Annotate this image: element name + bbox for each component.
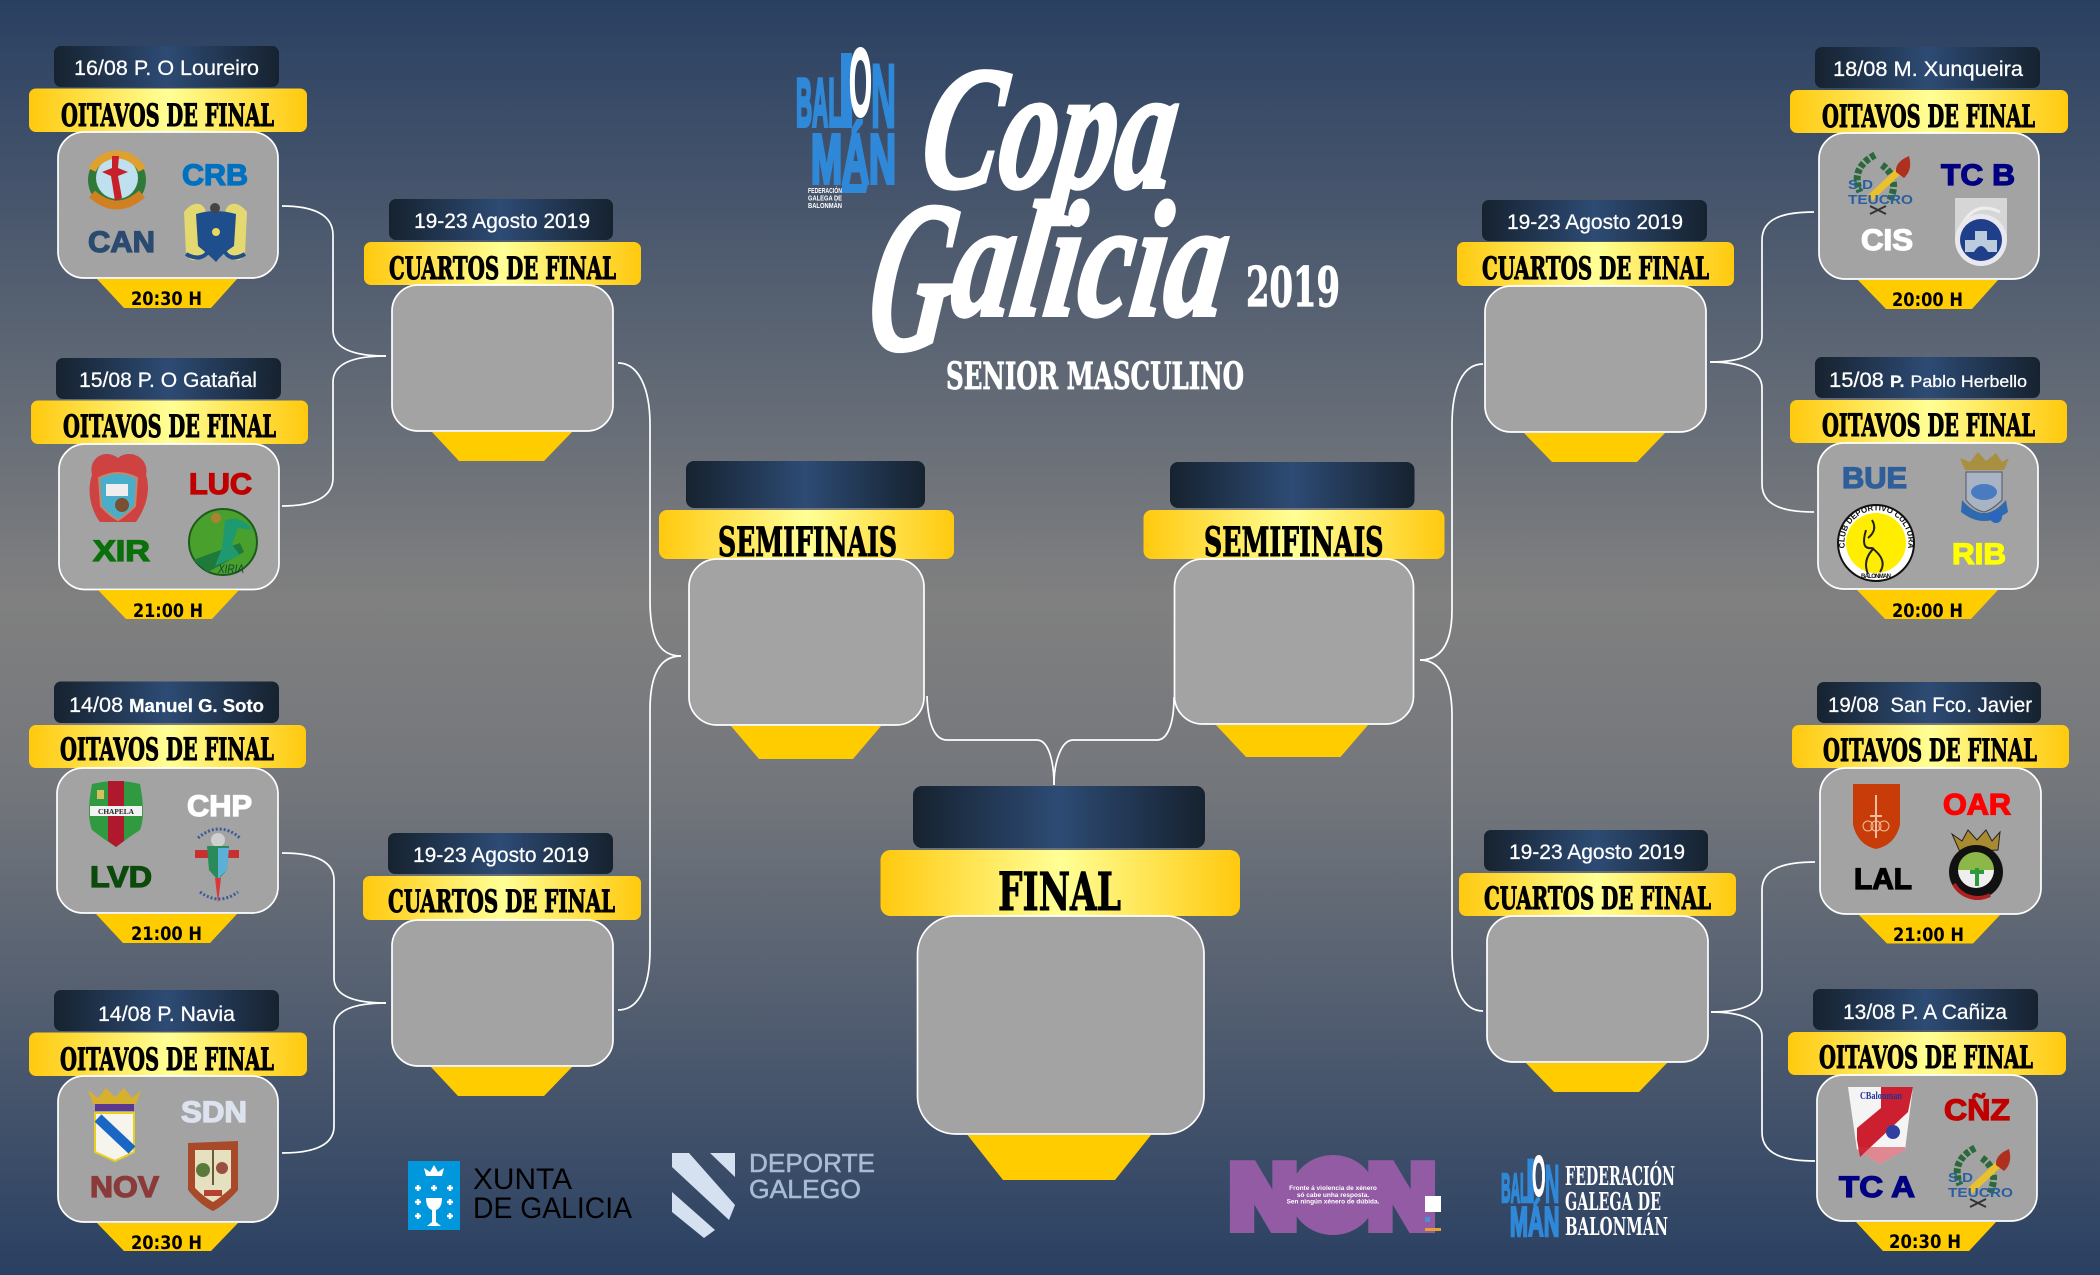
team code LUC: LUC <box>189 468 252 501</box>
logo: Xunta de Galicia <box>408 1161 632 1230</box>
icon: Lavadores crest <box>195 829 240 903</box>
round banner <box>659 510 954 559</box>
team code SDN: SDN <box>181 1096 247 1129</box>
panel: oitavos bottom-right 1 <box>1792 682 2069 946</box>
match time: 20:30 H <box>131 1232 202 1254</box>
team code TC B: TC B <box>1941 159 2015 192</box>
match card <box>1819 133 2039 279</box>
team code LVD: LVD <box>90 861 152 894</box>
logo: NON campaign: NON <box>1230 1147 1435 1246</box>
round banner <box>31 400 308 444</box>
time tab <box>431 1067 572 1096</box>
icon: Lucense crest <box>90 454 148 522</box>
bracket connectors <box>282 206 1815 1161</box>
round name: FINAL <box>998 862 1121 923</box>
icon: Teucro crest: S.D <box>1848 177 1873 192</box>
icon: Escolas Xiria crest <box>189 509 257 576</box>
icon: Cangas crest <box>184 203 247 262</box>
date: 19-23 Agosto 2019 <box>413 844 589 867</box>
match time: 20:00 H <box>1892 600 1963 622</box>
logo: Balonmán federation (top): FEDERACIÓN <box>808 186 842 195</box>
date header <box>1484 830 1708 871</box>
time tab <box>1216 725 1368 757</box>
round banner <box>29 725 306 768</box>
round banner <box>1457 242 1734 286</box>
panel: final <box>880 786 1240 1180</box>
panel: cuartos top-left <box>364 199 641 461</box>
date: 19-23 Agosto 2019 <box>1507 211 1683 234</box>
logo: Xunta de Galicia: DE GALICIA <box>473 1192 632 1225</box>
icon: Cañiza crest: CBalonman <box>1860 1091 1902 1102</box>
round banner <box>1144 510 1444 559</box>
icon: Ribeiro crest <box>1837 504 1915 582</box>
campaign message <box>1287 1185 1380 1206</box>
logo: Balonmán federation (top): MÁN <box>811 120 896 198</box>
campaign message: Sen ningún xénero de dúbida. <box>1287 1198 1380 1206</box>
panel: cuartos bottom-left <box>363 833 641 1096</box>
wordmark: DEPORTE <box>749 1148 875 1178</box>
team code CÑZ: CÑZ <box>1944 1093 2010 1127</box>
time tab <box>1859 915 2000 944</box>
round banner <box>1788 1032 2066 1075</box>
panel: oitavos bottom-right 2 <box>1788 989 2066 1253</box>
title: Copa Galicia 2019 <box>856 32 1340 396</box>
logo: Federación Galega de Balonmán <box>1501 1145 1675 1245</box>
round banner <box>364 242 641 285</box>
icon: Teucro crest <box>1948 1148 2013 1207</box>
round banner <box>1790 400 2067 443</box>
date: 19-23 Agosto 2019 <box>1509 841 1685 864</box>
icon: Teucro crest: S.D <box>1948 1170 1973 1185</box>
date header <box>389 199 613 240</box>
logo: Balonmán federation (top): BALONMÁN <box>808 201 842 210</box>
title: Copa Galicia 2019: alicia <box>943 168 1241 351</box>
date and venue: 14/08 P. Navia <box>98 1003 235 1026</box>
icon: Cisne crest <box>1955 198 2007 266</box>
date and venue: 19/08 San Fco. Javier <box>1828 694 2032 717</box>
round name: CUARTOS DE FINAL <box>1482 251 1709 287</box>
time tab <box>98 590 239 619</box>
match card <box>1487 916 1708 1062</box>
team code CRB: CRB <box>182 159 248 192</box>
panel: semifinal left <box>659 461 954 759</box>
date header <box>1815 47 2040 88</box>
team code CIS: CIS <box>1861 224 1913 257</box>
round name: CUARTOS DE FINAL <box>1484 881 1711 917</box>
logo: Deporte Galego <box>672 1148 875 1238</box>
date header <box>1813 989 2038 1030</box>
title: Copa Galicia 2019: Copa <box>912 32 1191 226</box>
panel: oitavos bottom-left 1 <box>29 682 306 945</box>
time tab <box>1857 590 1998 619</box>
team code XIR: XIR <box>93 535 150 568</box>
match card <box>1818 443 2038 589</box>
team code CHP: CHP <box>187 790 252 823</box>
icon: Cañiza crest <box>1848 1087 1913 1164</box>
match card <box>689 559 924 725</box>
team code LAL: LAL <box>1854 863 1912 896</box>
logo: Federación Galega de Balonmán: BALONMÁN <box>1565 1212 1668 1241</box>
wordmark: XUNTA <box>473 1163 572 1196</box>
icon: Lalín crest <box>1949 830 2003 899</box>
match time: 21:00 H <box>133 600 203 622</box>
icon: Teucro crest: TEUCRO <box>1948 1185 2013 1200</box>
panel: semifinal right <box>1144 462 1444 757</box>
date header <box>388 833 613 874</box>
icon: Teucro crest <box>1848 155 1913 214</box>
icon: Teucro crest: TEUCRO <box>1848 192 1913 207</box>
round name: OITAVOS DE FINAL <box>61 98 274 134</box>
date and venue: 15/08 P. O Gatañal <box>79 369 257 392</box>
icon: Novás crest <box>188 1141 238 1211</box>
icon: Galicia flag <box>408 1161 460 1230</box>
subtitle: senior masculino: SENIOR MASCULINO <box>946 354 1244 398</box>
time tab <box>432 432 572 461</box>
date header <box>1482 200 1707 241</box>
date header <box>1170 462 1414 508</box>
match card <box>1174 559 1414 724</box>
match card <box>1820 768 2041 914</box>
icon: Chapela crest <box>89 781 143 847</box>
logo: Federación Galega de Balonmán: GALEGA DE <box>1565 1187 1661 1216</box>
date header <box>56 358 281 399</box>
date header <box>686 461 925 508</box>
match time: 21:00 H <box>1893 924 1964 946</box>
panel: oitavos top-left 2 <box>31 358 308 622</box>
title: Copa Galicia 2019: 2019 <box>1246 255 1340 319</box>
icon: Ribeiro crest: CLUB DEPORTIVO CULTURAL RIBEIRO <box>1839 506 1913 548</box>
logo: Balonmán federation (top) <box>796 28 896 210</box>
panel: oitavos top-left 1 <box>29 46 307 310</box>
match card <box>392 920 613 1066</box>
round banner <box>29 1032 307 1076</box>
team code NOV: NOV <box>90 1171 159 1204</box>
icon: Ribeiro crest: BALONMAN <box>1861 574 1891 580</box>
team code BUE: BUE <box>1842 462 1907 495</box>
match card <box>392 285 613 431</box>
icon: Balonmán mark: O <box>1532 1145 1545 1209</box>
campaign message: só cabe unha resposta. <box>1297 1192 1369 1199</box>
date header <box>1815 357 2040 398</box>
panel: oitavos top-right 1 <box>1790 47 2068 311</box>
panel: cuartos bottom-right <box>1459 830 1736 1092</box>
match card <box>57 768 278 913</box>
icon: Chapela crest: CHAPELA <box>98 808 134 816</box>
date: 19-23 Agosto 2019 <box>414 210 590 233</box>
logo: Federación Galega de Balonmán: N <box>1545 1155 1559 1215</box>
time tab <box>731 726 881 759</box>
round banner <box>1792 725 2069 768</box>
match time: 21:00 H <box>131 923 202 945</box>
date header <box>1817 682 2041 723</box>
time tab <box>97 279 237 308</box>
match time: 20:30 H <box>1889 1231 1961 1253</box>
round name: SEMIFINAIS <box>1204 519 1384 566</box>
icon: OAR crest <box>1853 784 1900 849</box>
match time: 20:00 H <box>1892 289 1963 311</box>
team code CAN: CAN <box>88 226 155 259</box>
match card <box>59 444 279 590</box>
icon: Carballiño crest <box>88 151 146 209</box>
wordmark: FEDERACIÓN <box>1565 1160 1675 1192</box>
icon: Buelas crest <box>1960 452 2009 523</box>
team code TC A: TC A <box>1839 1171 1915 1204</box>
icon: Escolas Xiria crest: XIRIA <box>217 562 244 576</box>
round banner <box>1459 873 1736 916</box>
logo: Balonmán federation (top): BAL <box>796 65 842 141</box>
date header <box>913 786 1205 848</box>
time tab <box>1856 1222 1996 1251</box>
time tab <box>968 1135 1151 1180</box>
date header <box>54 682 279 723</box>
round name: CUARTOS DE FINAL <box>388 884 615 920</box>
match card <box>1485 286 1706 432</box>
campaign message: Fronte á violencia de xénero <box>1289 1185 1377 1192</box>
team code RIB: RIB <box>1952 538 2006 571</box>
time tab <box>1524 433 1665 462</box>
time tab <box>1526 1063 1667 1092</box>
round name: SEMIFINAIS <box>718 519 897 566</box>
round name: OITAVOS DE FINAL <box>60 732 274 768</box>
title: Copa Galicia 2019: G <box>856 157 972 396</box>
date and venue: 14/08 Manuel G. Soto <box>69 694 264 717</box>
time tab <box>96 914 237 943</box>
time tab <box>1858 280 1998 309</box>
logo: Deporte Galego: GALEGO <box>749 1174 861 1204</box>
panel: oitavos top-right 2 <box>1790 357 2067 622</box>
round banner <box>29 88 307 132</box>
round banner <box>880 850 1240 916</box>
icon: Balonmán mark: BAL <box>1501 1167 1528 1211</box>
match card <box>58 132 278 278</box>
date and venue: 18/08 M. Xunqueira <box>1833 58 2023 81</box>
icon: Balonmán mark: MÁN <box>1510 1199 1559 1245</box>
round name: OITAVOS DE FINAL <box>63 409 276 445</box>
icon: striped shield <box>672 1153 735 1238</box>
logo: Balonmán federation (top): GALEGA DE <box>808 196 842 202</box>
round name: CUARTOS DE FINAL <box>389 251 616 287</box>
panel: oitavos bottom-left 2 <box>29 990 307 1254</box>
text: N <box>871 47 896 147</box>
round name: OITAVOS DE FINAL <box>60 1042 274 1078</box>
icon: Seis do Nadal crest <box>88 1088 141 1161</box>
date and venue: 15/08 P. Pablo Herbello <box>1829 369 2027 392</box>
panel: cuartos top-right <box>1457 200 1734 462</box>
date header <box>54 990 279 1031</box>
match card <box>58 1076 278 1222</box>
date header <box>54 46 279 87</box>
round banner <box>363 876 641 920</box>
date and venue: 16/08 P. O Loureiro <box>74 57 259 80</box>
time tab <box>97 1223 238 1251</box>
match card <box>918 916 1204 1134</box>
match time: 20:30 H <box>131 288 202 310</box>
team code OAR: OAR <box>1943 788 2011 822</box>
icon: Balonmán mark <box>1501 1145 1559 1245</box>
date and venue: 13/08 P. A Cañiza <box>1843 1001 2007 1024</box>
match card <box>1817 1075 2037 1221</box>
round banner <box>1790 90 2068 133</box>
logo: Balonmán federation (top): O <box>849 28 872 137</box>
